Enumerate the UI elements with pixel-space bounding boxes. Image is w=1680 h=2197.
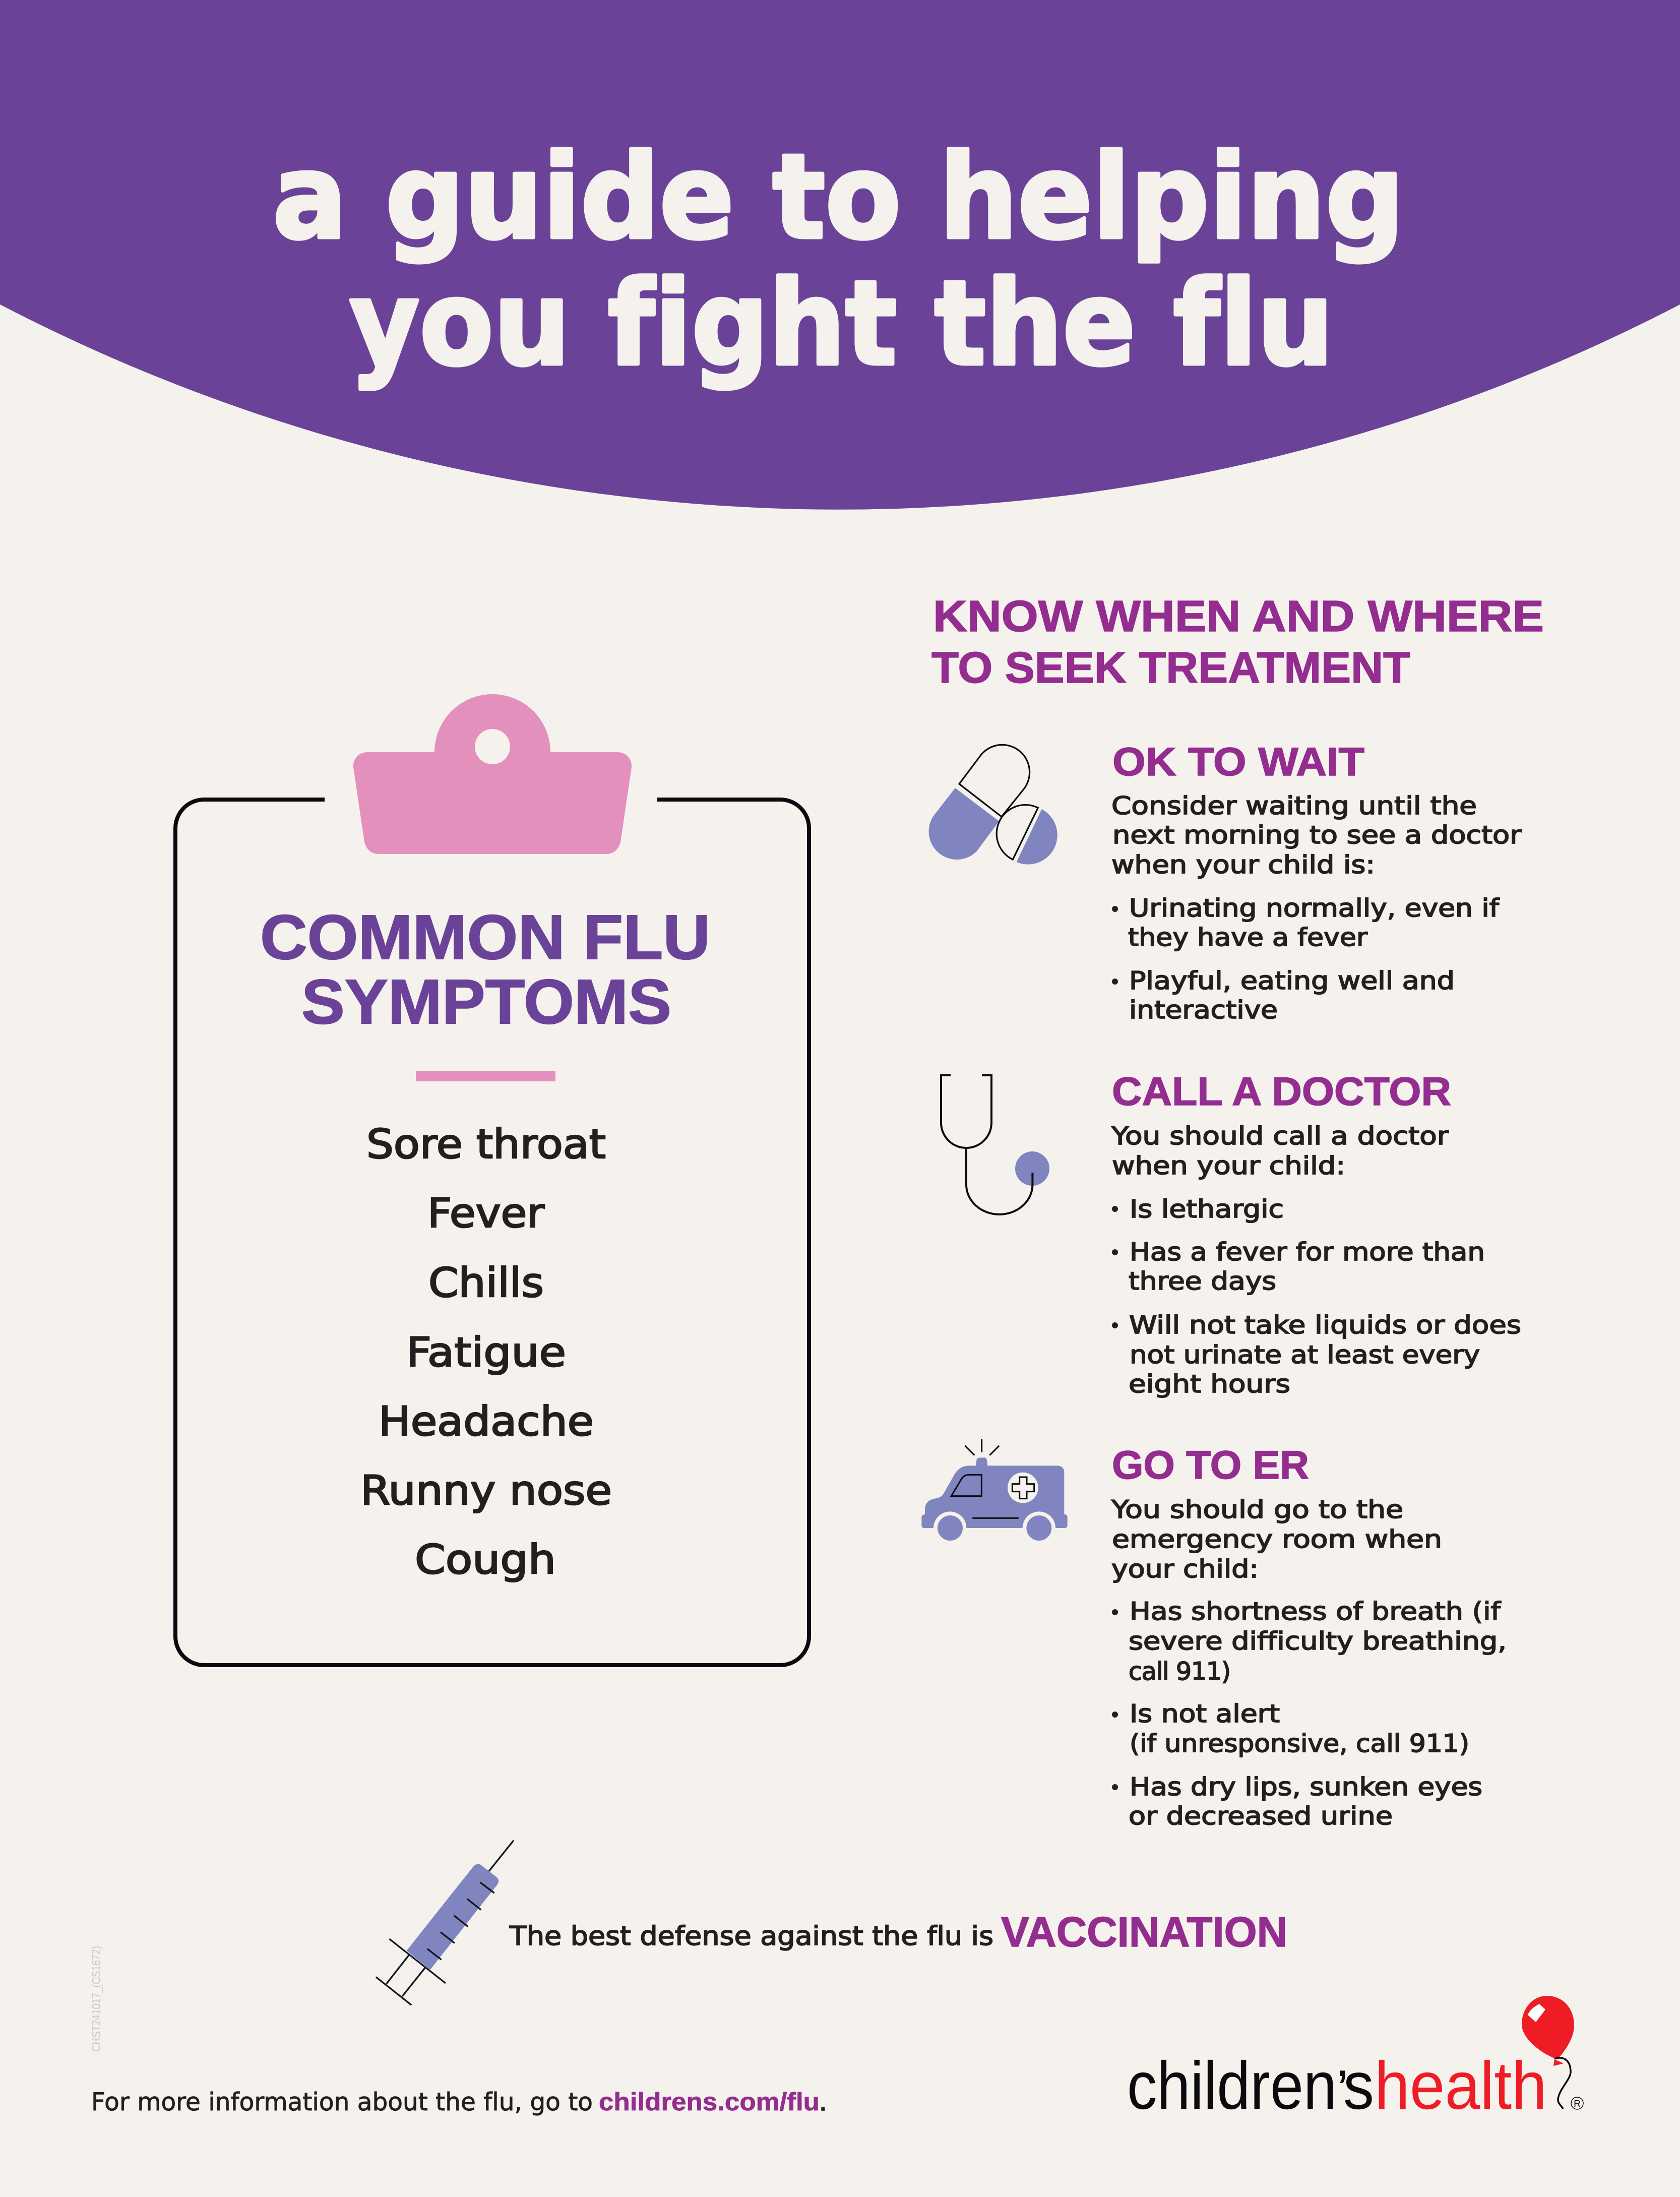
panel heading — [260, 902, 710, 1037]
logo: children's health: s — [1343, 2048, 1374, 2123]
go to er heading: GO TO ER — [1112, 1442, 1309, 1487]
logo: children's health — [1127, 1996, 1583, 2123]
ok to wait text: Playful, eating well and — [1129, 966, 1455, 995]
logo: children's health: children — [1127, 2048, 1337, 2123]
section: ok to wait — [1111, 739, 1522, 1024]
ok to wait text: they have a fever — [1128, 923, 1368, 952]
go to er text: or decreased urine — [1129, 1802, 1393, 1830]
print code: CHST241017_(CS1672) — [90, 1946, 103, 2052]
title: a guide to helping — [273, 129, 1404, 265]
symptom list: Headache — [379, 1398, 594, 1445]
vaccination callout: The best defense against the flu is — [509, 1921, 993, 1951]
call a doctor text: Is lethargic — [1130, 1195, 1284, 1224]
logo: children's health: health — [1375, 2048, 1547, 2123]
call a doctor text: not urinate at least every — [1130, 1340, 1480, 1369]
panel heading: SYMPTOMS — [301, 967, 671, 1037]
balloon — [1522, 1996, 1574, 2109]
call a doctor text: You should call a doctor — [1111, 1122, 1449, 1150]
vaccination callout: VACCINATION — [1001, 1908, 1287, 1956]
go to er text: emergency room when — [1112, 1525, 1442, 1554]
ok to wait heading: OK TO WAIT — [1112, 739, 1364, 784]
symptom list: Runny nose — [360, 1467, 612, 1514]
section: call a doctor — [1111, 1069, 1521, 1398]
symptom list: Fever — [427, 1190, 544, 1237]
call a doctor text: Will not take liquids or does — [1129, 1311, 1521, 1339]
section heading: know when and where: TO SEEK TREATMENT — [931, 643, 1410, 692]
symptom list: Fatigue — [406, 1329, 566, 1376]
symptom list: Chills — [428, 1259, 544, 1306]
logo: children's health: ’ — [1336, 2059, 1348, 2121]
footer text — [91, 2088, 827, 2116]
panel: common flu symptoms clipboard — [175, 694, 809, 1665]
footer text: . — [819, 2088, 827, 2116]
call a doctor text: when your child: — [1112, 1151, 1345, 1180]
call a doctor heading: CALL A DOCTOR — [1112, 1069, 1451, 1114]
call a doctor text — [1111, 1122, 1521, 1398]
registered mark: R — [1574, 2099, 1581, 2109]
symptom list: Cough — [415, 1536, 556, 1583]
clipboard outline — [175, 800, 809, 1665]
go to er text: Is not alert — [1130, 1699, 1280, 1728]
symptom list: Sore throat — [366, 1121, 606, 1168]
go to er text: (if unresponsive, call 911) — [1130, 1729, 1469, 1758]
title — [273, 129, 1404, 392]
header banner — [0, 0, 1680, 510]
panel heading: COMMON FLU — [260, 902, 710, 972]
vaccination callout — [509, 1908, 1287, 1956]
go to er text: Has shortness of breath (if — [1130, 1597, 1502, 1626]
call a doctor text: eight hours — [1129, 1370, 1290, 1398]
go to er text: severe difficulty breathing, — [1129, 1627, 1507, 1656]
ok to wait text: Consider waiting until the — [1111, 791, 1477, 820]
go to er text: call 911) — [1129, 1657, 1231, 1686]
heading underline bar — [416, 1071, 555, 1081]
icon: capsule and tablet — [929, 745, 1057, 865]
clipboard clip — [353, 694, 632, 854]
ok to wait text: Urinating normally, even if — [1129, 894, 1500, 923]
call a doctor text: three days — [1129, 1267, 1276, 1296]
ok to wait text — [1111, 791, 1522, 1024]
ok to wait text: when your child is: — [1111, 850, 1375, 879]
symptom list — [360, 1121, 612, 1583]
ok to wait text: next morning to see a doctor — [1112, 821, 1522, 849]
go to er text: Has dry lips, sunken eyes — [1130, 1773, 1482, 1801]
registered mark — [1571, 2097, 1583, 2109]
icon: ambulance — [921, 1439, 1068, 1541]
call a doctor text: Has a fever for more than — [1130, 1238, 1485, 1266]
section: go to er — [1111, 1442, 1507, 1830]
footer text: For more information about the flu, go to — [91, 2088, 593, 2116]
go to er text — [1111, 1495, 1507, 1830]
ok to wait text: interactive — [1129, 996, 1278, 1024]
go to er text: You should go to the — [1111, 1495, 1403, 1524]
icon: syringe — [376, 1841, 514, 2005]
footer text: childrens.com/flu — [599, 2088, 820, 2116]
section heading: know when and where — [931, 592, 1544, 692]
icon: stethoscope — [941, 1075, 1049, 1214]
go to er text: your child: — [1111, 1555, 1259, 1583]
section heading: know when and where: KNOW WHEN AND WHERE — [933, 592, 1544, 641]
title: you fight the flu — [349, 256, 1334, 392]
